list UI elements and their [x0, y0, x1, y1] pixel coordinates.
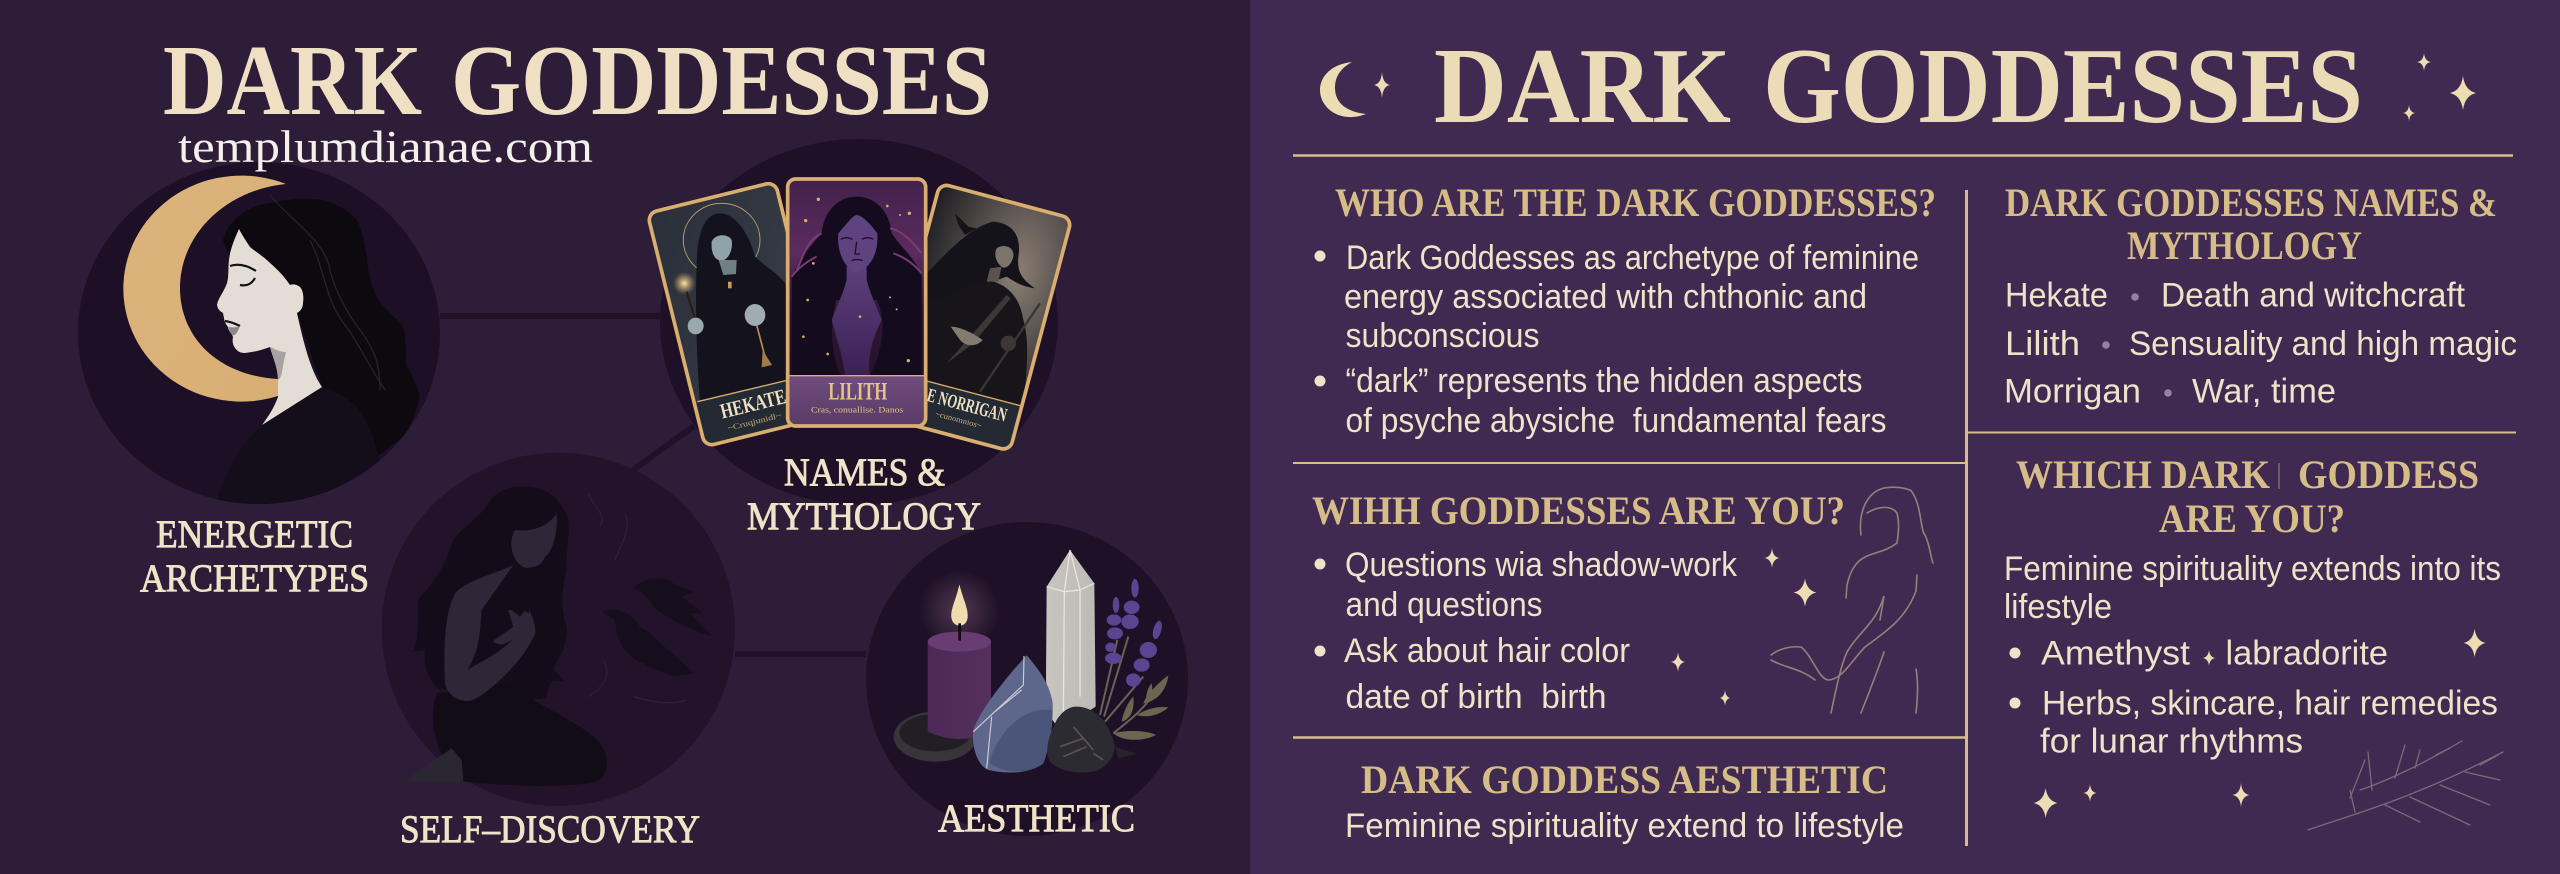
- line art: herb sprigs: [2308, 741, 2503, 830]
- body text: Dark Goddesses as archetype of feminine: [1346, 239, 1919, 277]
- body text: energy associated with chthonic and: [1344, 278, 1867, 316]
- label: names and mythology: MYTHOLOGY: [747, 495, 981, 538]
- names list: War, time: [2192, 372, 2336, 410]
- names list: Death and witchcraft: [2161, 276, 2466, 314]
- names list: Hekate: [2005, 276, 2108, 314]
- line art: goddess figure: [1771, 487, 1933, 713]
- connector lines between circles: [440, 316, 866, 654]
- icon: crescent moon: [123, 176, 286, 402]
- label: energetic archetypes: ENERGETIC: [156, 513, 353, 556]
- woman's face: [511, 513, 557, 568]
- icon: lavender and leaves: [1100, 579, 1168, 740]
- body text: date of birth birth: [1346, 678, 1606, 716]
- names list: Lilith: [2005, 325, 2080, 363]
- label: energetic archetypes: [140, 513, 369, 600]
- icon: crescent moon: [1320, 62, 1366, 117]
- heading: WHO ARE THE DARK GODDESSES?: [1335, 180, 1936, 225]
- heading: WIHH GODDESSES ARE YOU?: [1312, 488, 1845, 533]
- icon: clear quartz crystal: [1046, 550, 1096, 730]
- card: Morrigan: [914, 184, 1072, 451]
- label: self-discovery: SELF–DISCOVERY: [400, 808, 700, 851]
- icon: sparkles: [2034, 629, 2486, 818]
- woman's hair: [412, 486, 569, 699]
- card: Lilith: [788, 179, 926, 426]
- heading: DARK GODDESSES NAMES &: [2005, 180, 2497, 225]
- website address: templumdianae.com: [178, 121, 593, 172]
- tarot cards: [647, 179, 1072, 463]
- foot: [403, 748, 463, 782]
- section: which dark goddess are you: [2004, 452, 2503, 830]
- heading: DARK GODDESS AESTHETIC: [1361, 757, 1888, 802]
- label: energetic archetypes: ARCHETYPES: [140, 557, 369, 600]
- right title header: [1320, 27, 2476, 146]
- title: GODDESSES: [1763, 27, 2363, 146]
- title: DARK: [1434, 27, 1731, 146]
- facial features: [225, 265, 256, 326]
- left title: DARK: [163, 24, 422, 136]
- circle: aesthetic background: [866, 522, 1188, 836]
- circle: self-discovery illustration: [382, 453, 735, 806]
- heading: GODDESS: [2298, 452, 2479, 497]
- bullets: [1314, 558, 1326, 656]
- woman's hair and body: [215, 199, 420, 520]
- heading: WHICH DARK: [2016, 452, 2270, 497]
- icon: candle flame: [951, 584, 968, 626]
- body text: of psyche abysiche fundamental fears: [1346, 402, 1886, 440]
- hair lock over chest: [510, 562, 543, 613]
- names list: Sensuality and high magic: [2129, 325, 2517, 363]
- panel: left background: [0, 0, 1250, 874]
- body text: lifestyle: [2004, 588, 2112, 626]
- ravens: [602, 578, 713, 677]
- woman's torso and arm: [444, 565, 535, 701]
- body text: Ask about hair color: [1344, 632, 1630, 670]
- body text: Questions wia shadow-work: [1345, 546, 1738, 584]
- body text: Feminine spirituality extend to lifestyle: [1345, 807, 1904, 845]
- heading: MYTHOLOGY: [2127, 223, 2362, 268]
- icon: blue stone: [973, 655, 1053, 773]
- heading: [2016, 452, 2479, 541]
- body text: “dark” represents the hidden aspects: [1346, 362, 1862, 400]
- body text: [1344, 239, 1919, 440]
- section: which goddesses are you: [1312, 487, 1933, 716]
- body text: for lunar rhythms: [2040, 722, 2303, 760]
- body text: [1344, 546, 1738, 716]
- circle: energetic archetypes illustration: [78, 162, 440, 520]
- panel: right background: [1250, 0, 2560, 874]
- icon: candle plate: [894, 712, 977, 762]
- body text: Herbs, skincare, hair remedies: [2042, 684, 2498, 722]
- card: Lilith: Cras, conuallise. Danos: [811, 406, 903, 415]
- icon: sparkle: [1374, 72, 1390, 98]
- section: dark goddess aesthetic: [1345, 757, 1904, 845]
- names list: [2004, 276, 2517, 410]
- left title: [163, 24, 992, 136]
- body text: and questions: [1346, 586, 1542, 624]
- body text: labradorite: [2226, 634, 2388, 672]
- label: aesthetic: AESTHETIC: [938, 797, 1135, 840]
- section: who are the dark goddesses: [1314, 180, 1936, 440]
- body text: subconscious: [1346, 317, 1540, 355]
- kneeling legs: [433, 680, 607, 786]
- heading: ARE YOU?: [2159, 496, 2345, 541]
- label: names and mythology: NAMES &: [784, 451, 945, 494]
- icon: candle: [928, 642, 991, 739]
- bullets: [1314, 250, 1326, 386]
- grid rules: [1293, 156, 2516, 846]
- card: Lilith: LILITH: [828, 377, 888, 405]
- card: Hekate: [647, 182, 792, 446]
- woman's face in profile: [217, 229, 322, 425]
- icon: sparkles: [1671, 548, 1816, 706]
- circle: names and mythology background: [660, 139, 1058, 505]
- title: [1434, 27, 2363, 146]
- body text: Feminine spirituality extends into its: [2004, 550, 2501, 588]
- card: Hekate: HEKATE: [718, 384, 788, 424]
- card: Morrigan: ~cunomnios~: [934, 409, 983, 430]
- card: Morrigan: E NORRIGAN: [925, 385, 1009, 427]
- card: Hekate: ~Cruqjunidl~: [727, 410, 783, 433]
- icon: sparkles right: [2403, 53, 2476, 121]
- icon: black stone: [1115, 747, 1137, 758]
- body text: Amethyst: [2041, 634, 2191, 672]
- heading: [2005, 180, 2497, 268]
- left title: GODDESSES: [451, 24, 992, 136]
- names list: Morrigan: [2004, 372, 2141, 410]
- aesthetic still life: [894, 550, 1168, 773]
- label: names and mythology: [747, 451, 981, 538]
- section: names and mythology: [2004, 180, 2517, 410]
- body text: [2004, 550, 2501, 760]
